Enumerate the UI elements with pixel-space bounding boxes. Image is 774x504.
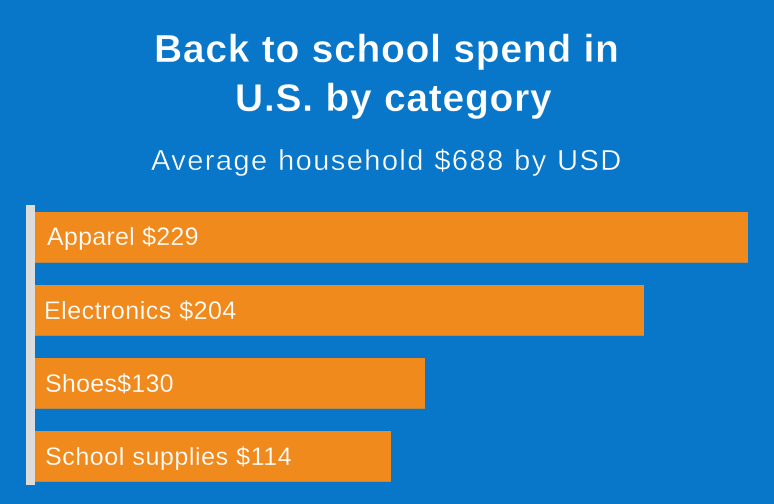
bar: apparel: Apparel $229 xyxy=(47,223,199,251)
title: Back to school spend in xyxy=(154,28,620,71)
axis xyxy=(26,205,35,485)
bar: electronics: Electronics $204 xyxy=(44,297,237,325)
bar chart xyxy=(26,205,35,485)
bar: shoes: Shoes$130 xyxy=(45,370,174,398)
title xyxy=(154,28,620,120)
subtitle: Average household $688 by USD xyxy=(151,145,623,177)
bar: school supplies: School supplies $114 xyxy=(45,443,292,471)
title: U.S. by category xyxy=(235,77,552,120)
bar: shoes xyxy=(35,358,425,409)
bar: apparel xyxy=(35,212,748,263)
bar: electronics xyxy=(35,285,644,336)
bar: school supplies xyxy=(35,431,391,482)
